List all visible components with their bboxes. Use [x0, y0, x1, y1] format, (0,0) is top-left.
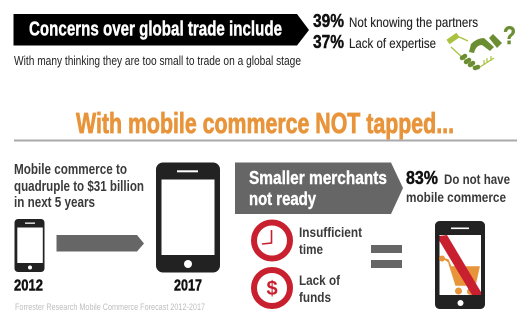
- icon: clock: [254, 222, 290, 258]
- stat: 83 percent: mobile commerce: [406, 189, 506, 205]
- text: insufficient time: Insufficient: [299, 224, 362, 240]
- subheading text: With many thinking they are too small to trade on a global stage: [14, 54, 301, 68]
- stat: 83 percent: [406, 167, 510, 205]
- stat: 37 percent: 37%: [313, 31, 344, 52]
- icon: handshake with question mark: ?: [503, 22, 516, 50]
- banner: smaller merchants not ready: not ready: [249, 188, 317, 209]
- text: mobile commerce forecast: Mobile commerce to: [14, 162, 127, 178]
- stat: 39 percent: 39%: [313, 10, 344, 31]
- banner: concerns over global trade: [14, 14, 309, 46]
- text: lack of funds: [299, 272, 340, 305]
- icon: handshake with question mark: [448, 22, 516, 68]
- icon: phone with crossed-out cart: [435, 221, 485, 309]
- banner: concerns over global trade: Concerns over global trade include: [29, 18, 282, 40]
- stat: 37 percent: Lack of expertise: [349, 35, 436, 51]
- icon: equals sign: [371, 245, 402, 268]
- label: 2012: 2012: [14, 278, 43, 294]
- text: lack of funds: Lack of: [299, 272, 340, 288]
- banner: smaller merchants not ready: Smaller merchants: [249, 167, 387, 188]
- icon: large phone 2017: [156, 162, 220, 272]
- text: mobile commerce forecast: quadruple to $31 billion: [14, 179, 144, 195]
- icon: dollar: [254, 270, 290, 306]
- stat: 83 percent: Do not have: [444, 171, 510, 187]
- text: insufficient time: time: [299, 241, 323, 257]
- banner: smaller merchants not ready: [235, 162, 403, 214]
- icon: dollar: $: [266, 278, 278, 300]
- icon: small phone 2012: [14, 219, 44, 272]
- source note: Forrester Research Mobile Commerce Forecast 2012-2017: [15, 302, 205, 313]
- stat: 37 percent: [313, 31, 436, 52]
- label: 2017: 2017: [174, 278, 202, 294]
- stat: 83 percent: 83%: [406, 167, 438, 188]
- stat: 39 percent: Not knowing the partners: [349, 14, 478, 30]
- text: insufficient time: [299, 224, 362, 257]
- text: mobile commerce forecast: [14, 162, 144, 211]
- text: lack of funds: funds: [299, 289, 331, 305]
- arrow: growth: [56, 235, 144, 252]
- stat: 39 percent: [313, 10, 478, 31]
- text: mobile commerce forecast: in next 5 years: [14, 195, 95, 211]
